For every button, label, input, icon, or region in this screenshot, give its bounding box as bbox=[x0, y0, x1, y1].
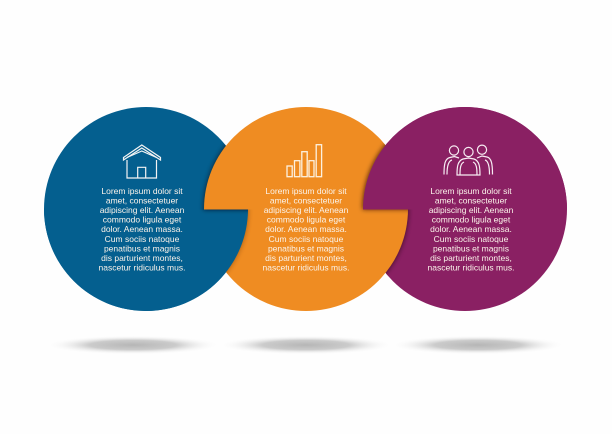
text block: purple circle: Lorem ipsum dolor sit bbox=[430, 186, 512, 196]
text block: blue circle: nascetur ridiculus mus. bbox=[99, 262, 185, 272]
text block: purple circle: nascetur ridiculus mus. bbox=[428, 262, 514, 272]
text block: purple circle bbox=[428, 186, 514, 272]
text block: orange circle: amet, consectetuer bbox=[270, 196, 342, 206]
text block: purple circle: commodo ligula eget bbox=[432, 215, 511, 225]
text block: orange circle bbox=[263, 186, 349, 272]
text block: blue circle: Lorem ipsum dolor sit bbox=[101, 186, 183, 196]
text block: orange circle: dis parturient montes, bbox=[265, 253, 347, 263]
text block: orange circle: Cum sociis natoque bbox=[269, 234, 344, 244]
ground shadow: right bbox=[391, 336, 565, 354]
panel: purple circle base bbox=[363, 107, 567, 311]
icon: house bbox=[124, 145, 160, 178]
text block: blue circle: adipiscing elit. Aenean bbox=[100, 205, 185, 215]
text block: blue circle bbox=[99, 186, 185, 272]
text block: orange circle: nascetur ridiculus mus. bbox=[263, 262, 349, 272]
icon: bar chart bbox=[287, 145, 322, 177]
text block: orange circle: commodo ligula eget bbox=[267, 215, 346, 225]
text block: orange circle: penatibus et magnis bbox=[268, 243, 344, 253]
text block: purple circle: dis parturient montes, bbox=[430, 253, 512, 263]
icon: people bbox=[444, 145, 492, 175]
ground shadow: center bbox=[219, 336, 393, 354]
text block: purple circle: amet, consectetuer bbox=[435, 196, 507, 206]
text block: purple circle: dolor. Aenean massa. bbox=[430, 224, 512, 234]
panel: orange circle bbox=[204, 107, 408, 311]
text block: orange circle: dolor. Aenean massa. bbox=[265, 224, 347, 234]
panel: purple circle overlapping upper half bbox=[363, 107, 567, 210]
text block: blue circle: dis parturient montes, bbox=[101, 253, 183, 263]
text block: blue circle: dolor. Aenean massa. bbox=[101, 224, 183, 234]
text block: purple circle: adipiscing elit. Aenean bbox=[429, 205, 514, 215]
text block: blue circle: Cum sociis natoque bbox=[105, 234, 180, 244]
text block: orange circle: adipiscing elit. Aenean bbox=[264, 205, 349, 215]
text block: blue circle: penatibus et magnis bbox=[104, 243, 180, 253]
panel: blue circle base bbox=[44, 107, 248, 311]
panel: blue circle overlapping lower half bbox=[44, 210, 248, 311]
ground shadow: left bbox=[46, 336, 220, 354]
text block: purple circle: penatibus et magnis bbox=[433, 243, 509, 253]
text block: blue circle: commodo ligula eget bbox=[103, 215, 182, 225]
text block: orange circle: Lorem ipsum dolor sit bbox=[265, 186, 347, 196]
text block: blue circle: amet, consectetuer bbox=[106, 196, 178, 206]
text block: purple circle: Cum sociis natoque bbox=[434, 234, 509, 244]
